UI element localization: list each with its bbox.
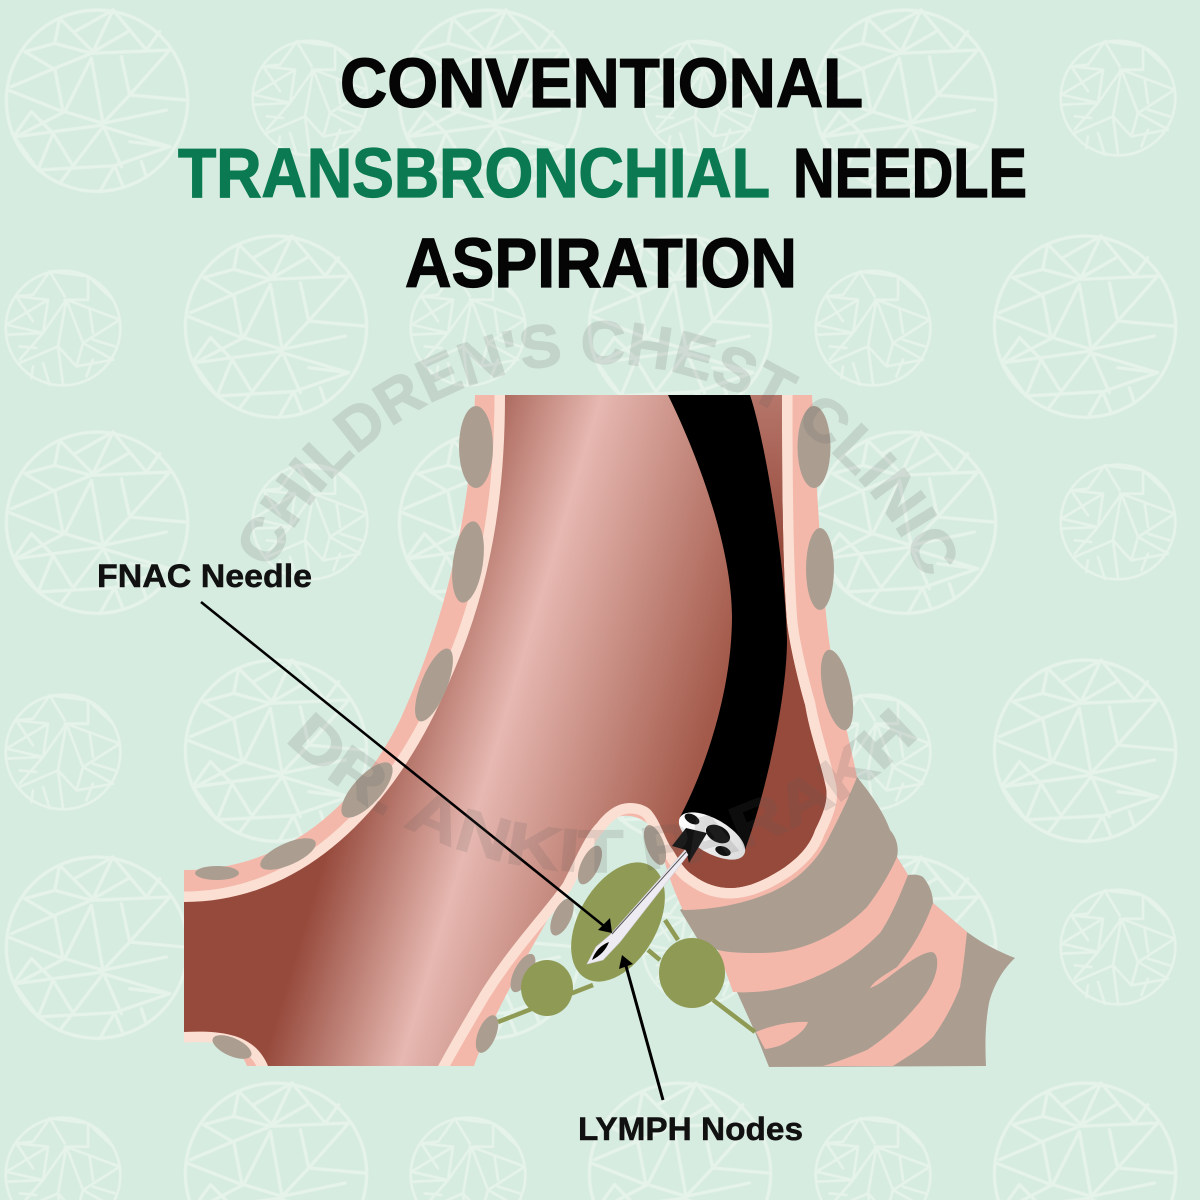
right bronchus cartilage [680, 777, 1015, 1067]
watermark: clinic name: CHILDREN'S CHEST CLINIC [240, 320, 956, 574]
arrow: lymph nodes pointer [619, 955, 663, 1100]
diagram: airway bifurcation [184, 395, 1015, 1067]
title: NEEDLE [793, 134, 1027, 212]
scope channels [672, 811, 733, 863]
airway wall [184, 395, 857, 1066]
lumen lining [184, 395, 827, 1066]
label: LYMPH Nodes: LYMPH Nodes [578, 1111, 803, 1147]
main airway lumen [184, 395, 827, 1066]
title: CONVENTIONAL [340, 44, 863, 122]
title: ASPIRATION [405, 224, 797, 302]
bronchoscope [668, 395, 787, 869]
label: FNAC Needle: FNAC Needle [97, 558, 312, 594]
right bronchus pink rings [718, 857, 967, 1066]
scope tip [671, 803, 753, 869]
cartilage ovals [195, 406, 859, 1064]
FNAC needle [587, 850, 688, 964]
title: TRANSBRONCHIAL [178, 134, 770, 212]
arrow: FNAC needle pointer [201, 602, 612, 933]
title [178, 44, 1027, 302]
right branch lumen [682, 395, 826, 888]
watermark: doctor name: DR. ANKIT PARAKH [287, 708, 918, 873]
lymph nodes [498, 846, 755, 1032]
